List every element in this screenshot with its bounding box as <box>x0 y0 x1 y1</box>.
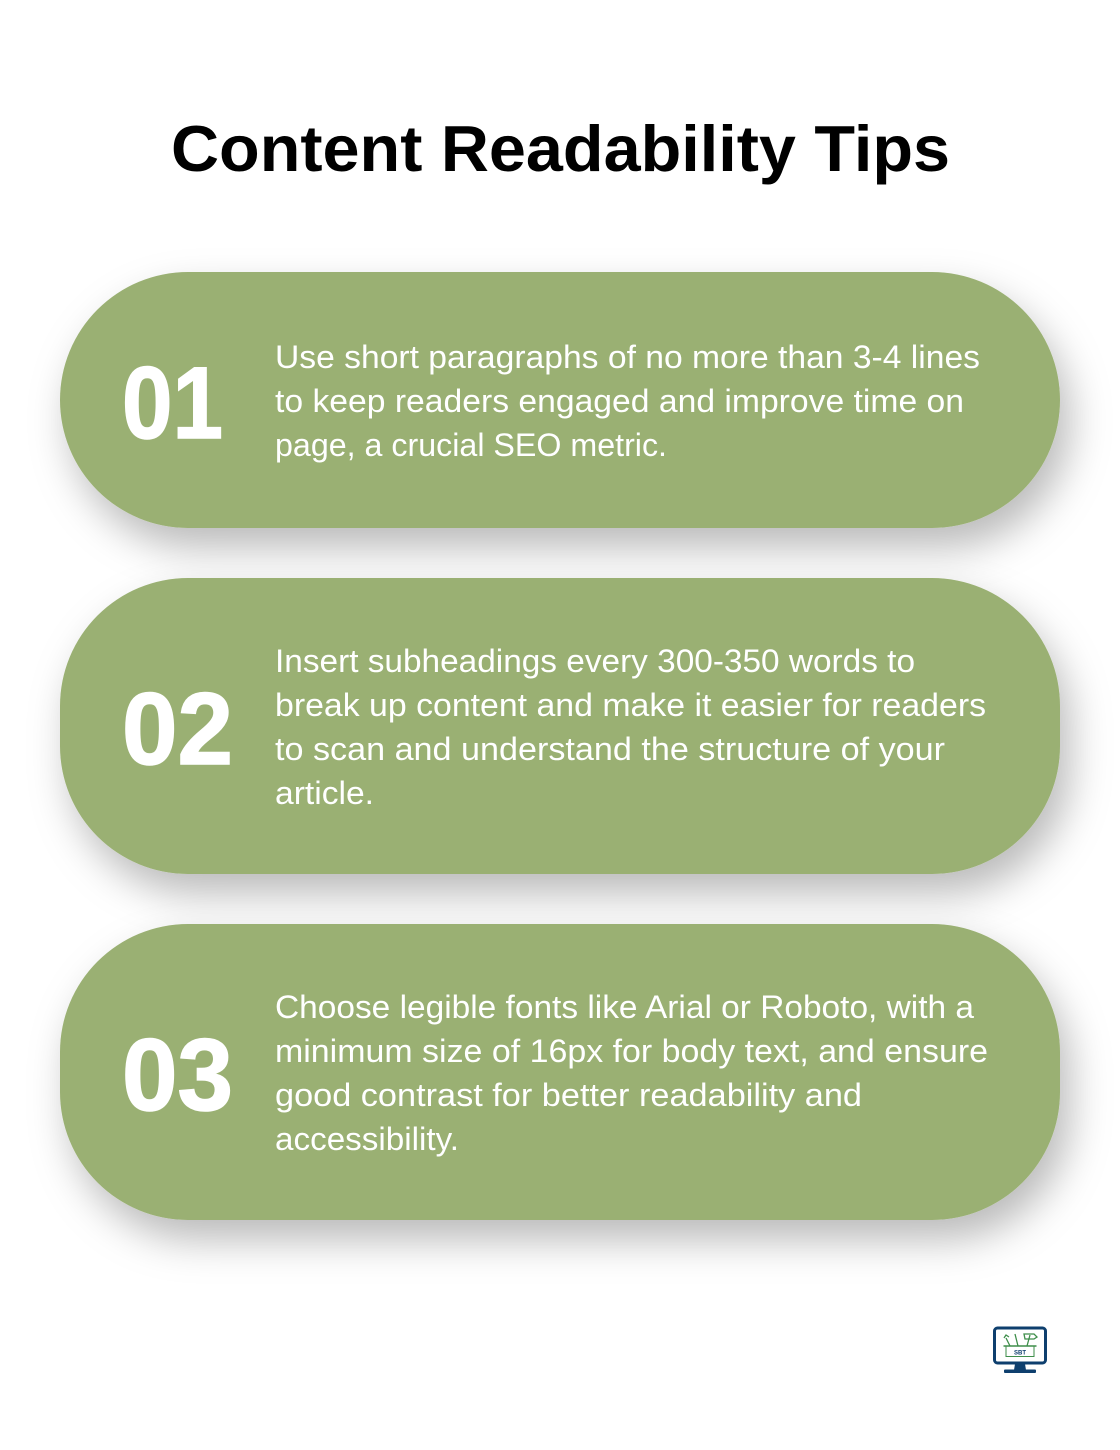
text block 03: good contrast for better readability and <box>275 1077 862 1113</box>
number 03: 03 <box>122 1018 233 1132</box>
text block 01: to keep readers engaged and improve time on <box>275 383 964 419</box>
text block 02: break up content and make it easier for readers <box>275 687 986 723</box>
card background 03 <box>60 924 1060 1220</box>
text block 02: article. <box>275 775 374 811</box>
panel: tip 02 <box>60 578 1060 874</box>
icon: monitor logo with toolbox <box>994 1328 1046 1373</box>
card background 01 <box>60 272 1060 528</box>
text block 03: minimum size of 16px for body text, and ensure <box>275 1033 988 1069</box>
panel: tip 03 <box>60 924 1060 1220</box>
text block 03 <box>275 989 988 1157</box>
text block 03: Choose legible fonts like Arial or Roboto, with a <box>275 989 974 1025</box>
text block 02: Insert subheadings every 300-350 words to <box>275 643 915 679</box>
number 02: 02 <box>122 672 233 786</box>
text block 01: page, a crucial SEO metric. <box>275 427 667 463</box>
card background 02 <box>60 578 1060 874</box>
text block 02: to scan and understand the structure of your <box>275 731 945 767</box>
panel: tip 01 <box>60 272 1060 528</box>
text block 01 <box>275 339 980 463</box>
number 01: 01 <box>122 346 223 460</box>
title: Content Readability Tips <box>171 112 950 185</box>
text block 01: Use short paragraphs of no more than 3-4 lines <box>275 339 980 375</box>
text block 02 <box>275 643 986 811</box>
icon: monitor logo with toolbox: SBT <box>1014 1350 1026 1356</box>
text block 03: accessibility. <box>275 1121 459 1157</box>
